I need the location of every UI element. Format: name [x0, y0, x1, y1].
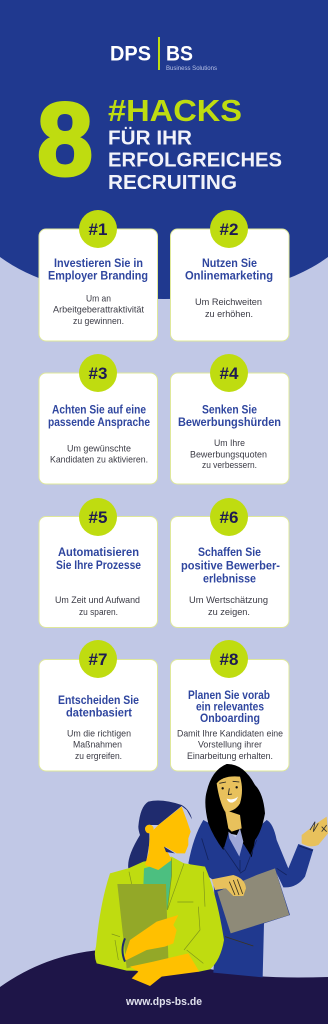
big number 8: 8: [37, 82, 93, 198]
panel: hack 4: Bewerbungshürden: [178, 415, 281, 429]
panel: hack 3: #3: [89, 364, 107, 383]
panel: hack 5: Sie Ihre Prozesse: [56, 558, 141, 572]
panel: hack 6: Um Wertschätzung: [189, 595, 268, 606]
title: #HACKS: [108, 93, 242, 128]
panel: hack 1: #1: [89, 220, 107, 239]
panel: hack 2: Um Reichweiten: [195, 297, 262, 308]
panel: hack 7: zu ergreifen.: [75, 751, 122, 762]
illustration: two women: [95, 764, 328, 986]
panel: hack 3: passende Ansprache: [48, 415, 150, 429]
panel: hack 6: #6: [220, 508, 238, 527]
panel: hack 6: zu zeigen.: [208, 607, 250, 618]
footer dark band: [0, 950, 328, 1024]
blue header shape: [0, 0, 328, 299]
title: ERFOLGREICHES: [108, 150, 282, 172]
panel: hack 8: Planen Sie vorab: [188, 688, 270, 702]
panel: hack 2: Onlinemarketing: [185, 268, 273, 282]
panel: hack 4: Um Ihre: [214, 438, 245, 449]
panel: hack 1: Um an: [86, 294, 111, 304]
panel: hack 6: positive Bewerber-: [181, 559, 280, 573]
panel: hack 5: [39, 498, 158, 628]
panel: hack 8: Vorstellung ihrer: [198, 740, 262, 751]
panel: hack 1: [39, 210, 158, 341]
panel: hack 8: [170, 640, 289, 771]
logo: Business Solutions: [166, 65, 218, 72]
panel: hack 6: Schaffen Sie: [198, 545, 261, 559]
panel: hack 5: Um Zeit und Aufwand: [55, 595, 140, 606]
title: FÜR IHR: [108, 126, 193, 150]
logo: BS: [166, 42, 193, 66]
panel: hack 4: Bewerbungsquoten: [190, 450, 267, 460]
title: RECRUITING: [108, 172, 237, 194]
title: [108, 93, 282, 194]
panel: hack 4: Senken Sie: [202, 402, 257, 416]
panel: hack 1: Arbeitgeberattraktivität: [53, 304, 144, 316]
panel: hack 2: zu erhöhen.: [205, 309, 253, 320]
panel: hack 3: Um gewünschte: [67, 444, 131, 455]
panel: hack 4: [170, 354, 289, 484]
logo: [110, 37, 218, 72]
panel: hack 6: erlebnisse: [203, 572, 256, 586]
panel: hack 5: Automatisieren: [58, 545, 139, 559]
panel: hack 3: Kandidaten zu aktivieren.: [50, 455, 148, 466]
panel: hack 6: [170, 498, 289, 628]
panel: hack 8: #8: [220, 650, 238, 669]
panel: hack 2: [170, 210, 289, 341]
panel: hack 7: Um die richtigen: [67, 729, 131, 740]
woman on the left: [95, 801, 224, 986]
panel: hack 7: Entscheiden Sie: [58, 693, 139, 707]
panel: hack 8: Damit Ihre Kandidaten eine: [177, 729, 283, 740]
panel: hack 7: datenbasiert: [66, 706, 132, 720]
panel: hack 4: #4: [220, 364, 239, 383]
panel: hack 2: Nutzen Sie: [202, 256, 257, 270]
panel: hack 1: Investieren Sie in: [54, 256, 143, 270]
panel: hack 3: [39, 354, 158, 484]
website url: www.dps-bs.de: [125, 996, 202, 1008]
panel: hack 8: ein relevantes: [196, 700, 264, 714]
panel: hack 5: #5: [89, 508, 107, 527]
panel: hack 7: Maßnahmen: [73, 740, 122, 751]
panel: hack 5: zu sparen.: [79, 607, 118, 618]
panel: hack 8: Onboarding: [200, 711, 260, 725]
panel: hack 1: zu gewinnen.: [73, 316, 124, 327]
panel: hack 4: zu verbessern.: [202, 460, 257, 471]
panel: hack 7: [39, 640, 158, 771]
panel: hack 3: Achten Sie auf eine: [52, 402, 146, 416]
woman on the right: [188, 764, 328, 977]
panel: hack 8: Einarbeitung erhalten.: [187, 751, 273, 762]
panel: hack 7: #7: [89, 650, 107, 669]
panel: hack 1: Employer Branding: [48, 268, 148, 282]
logo: DPS: [110, 42, 151, 66]
panel: hack 2: #2: [220, 220, 238, 239]
